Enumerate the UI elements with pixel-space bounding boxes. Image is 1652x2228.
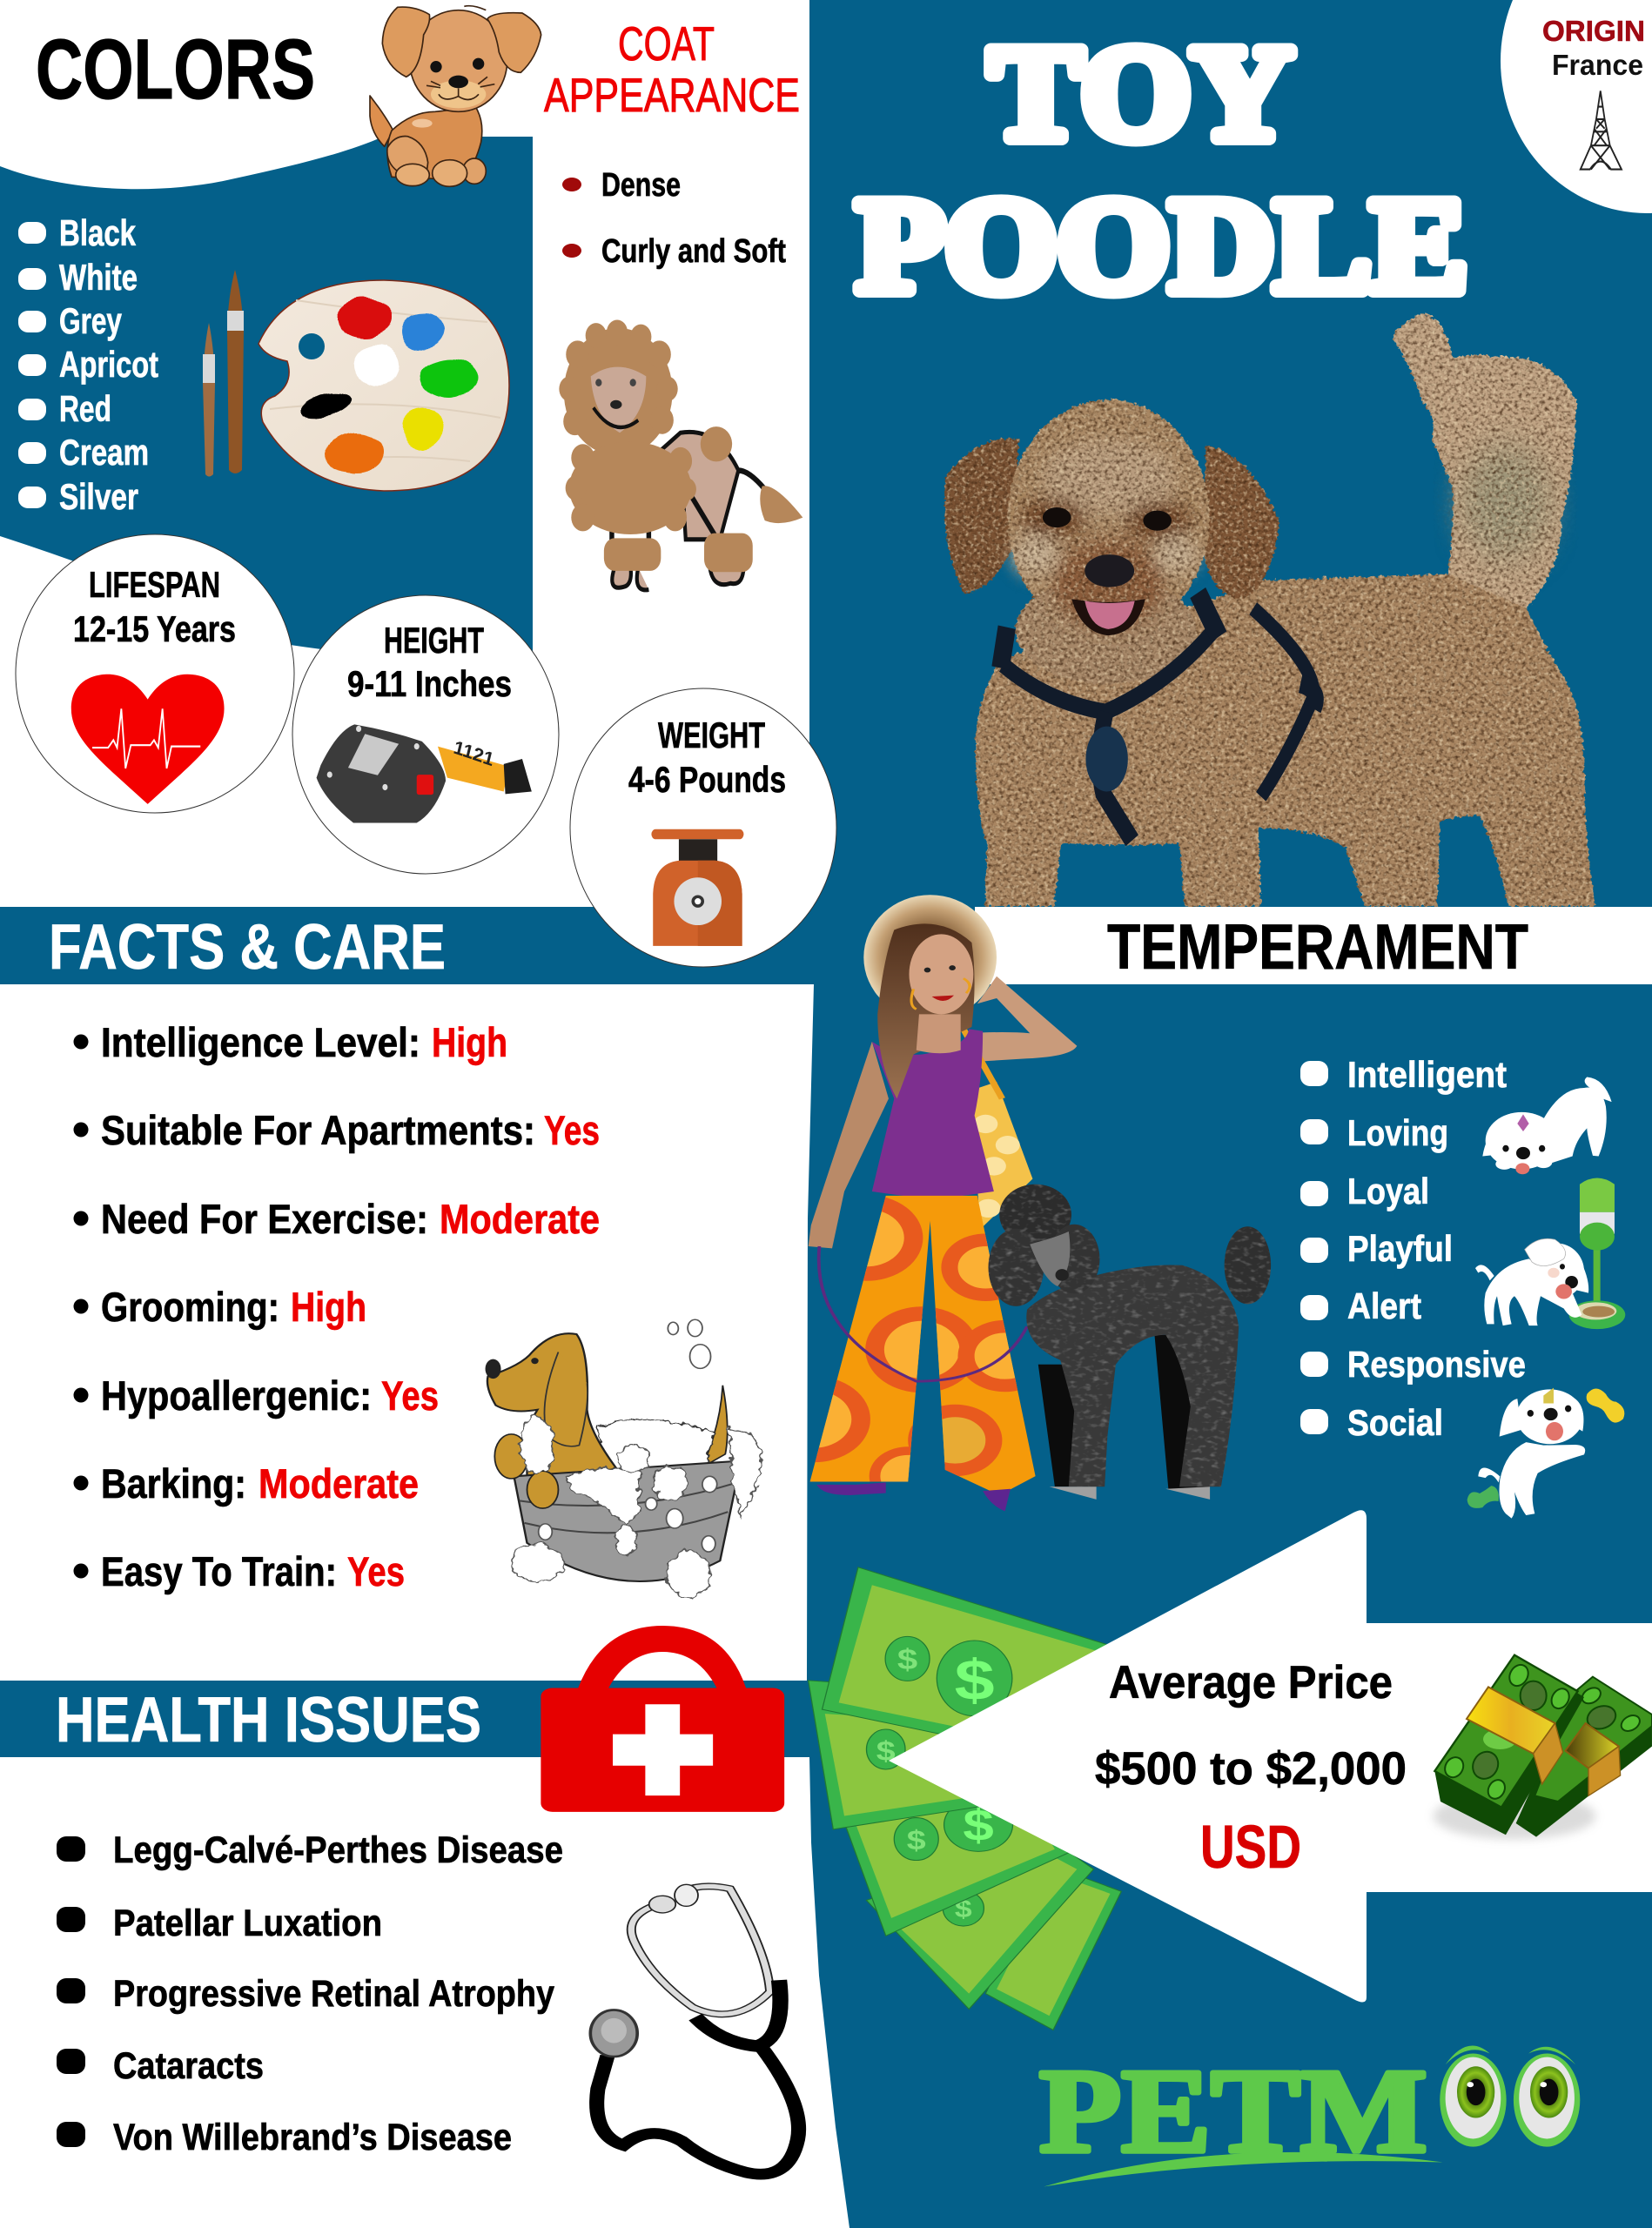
list: temperament: Loyal	[1347, 1171, 1429, 1211]
band: temperament: TEMPERAMENT	[1107, 912, 1528, 983]
list: facts and care: Suitable For Apartments:	[101, 1107, 535, 1153]
callout arrow: average price: USD	[1200, 1813, 1301, 1881]
icon: puppy	[370, 6, 541, 186]
list: temperament	[1300, 1054, 1526, 1443]
list: health issues: Progressive Retinal Atrophy	[113, 1973, 554, 2015]
icon: stethoscope	[590, 1884, 799, 2174]
list: health issues: Patellar Luxation	[113, 1903, 382, 1944]
title	[856, 18, 1467, 320]
list: health issues: Von Willebrand’s Disease	[113, 2117, 512, 2158]
list: colors: Black	[59, 212, 137, 253]
panel: top left white area	[0, 0, 809, 907]
illustration: fan of dollar bills: $	[955, 1895, 972, 1923]
illustration: dog in bath tub	[486, 1319, 762, 1597]
list: coat traits: Dense	[601, 167, 681, 204]
heading: coat appearance: COAT	[618, 17, 715, 70]
icon: eiffel tower	[1581, 91, 1622, 170]
list: colors: Red	[59, 388, 111, 429]
circle: height: 9-11 Inches	[347, 663, 512, 704]
list: health issues: Legg-Calvé-Perthes Disease	[113, 1829, 563, 1871]
list: health issues	[57, 1829, 563, 2158]
illustration: fan of dollar bills	[809, 1567, 1121, 2030]
icon: paint palette	[259, 280, 509, 491]
circle: height: HEIGHT	[384, 620, 484, 661]
illustration: fan of dollar bills: $	[955, 1648, 995, 1712]
illustration: fan of dollar bills: $	[876, 1735, 896, 1767]
list: temperament: Responsive	[1347, 1344, 1526, 1385]
list: temperament: Alert	[1347, 1285, 1421, 1326]
list: facts and care: Grooming:	[101, 1284, 279, 1330]
list: facts and care: High	[432, 1019, 507, 1065]
list: colors: Cream	[59, 432, 149, 473]
list: colors: Silver	[59, 476, 138, 517]
illustration: fan of dollar bills: $	[897, 1644, 917, 1676]
list: facts and care: High	[291, 1284, 366, 1330]
band: temperament	[975, 907, 1652, 984]
list: temperament: Loving	[1347, 1112, 1448, 1153]
list: facts and care: Yes	[544, 1107, 600, 1153]
list: colors: White	[59, 257, 138, 298]
circle: weight: 4-6 Pounds	[628, 759, 786, 800]
circle: origin: France	[1552, 49, 1643, 81]
callout arrow: average price	[889, 1510, 1652, 2003]
list: colors: Grey	[59, 300, 122, 341]
band: facts and care	[0, 908, 809, 984]
title: POODLE	[856, 171, 1467, 320]
circle: height	[292, 595, 559, 874]
list: colors: Apricot	[59, 344, 158, 385]
list: temperament: Playful	[1347, 1228, 1453, 1269]
callout arrow: average price: Average Price	[1109, 1657, 1393, 1708]
list: colors	[18, 212, 158, 517]
list: facts and care: Moderate	[259, 1460, 419, 1507]
icon: money stacks	[1434, 1655, 1652, 1839]
panel: lower left white area	[0, 984, 814, 1681]
list: temperament: Social	[1347, 1402, 1443, 1443]
panel: health white area	[0, 1757, 850, 2228]
list: facts and care: Yes	[381, 1372, 439, 1419]
list: facts and care: Need For Exercise:	[101, 1196, 428, 1242]
circle: origin: ORIGIN	[1542, 15, 1645, 47]
icon: first aid kit	[541, 1626, 784, 1812]
icon: paint brushes	[203, 270, 244, 477]
list: facts and care: Hypoallergenic:	[101, 1372, 372, 1419]
circle: weight	[570, 688, 836, 967]
heading: coat appearance	[544, 17, 800, 122]
heading: colors: COLORS	[36, 22, 315, 117]
icon: playing puppy	[1467, 1388, 1624, 1519]
circle: origin	[1501, 0, 1652, 213]
list: facts and care: Intelligence Level:	[101, 1019, 420, 1065]
illustration: cartoon poodle	[559, 320, 802, 590]
list: facts and care: Yes	[347, 1548, 405, 1594]
band: facts and care: FACTS & CARE	[49, 912, 446, 983]
title: TOY	[989, 18, 1293, 168]
circle: height: 1121	[452, 737, 496, 771]
band: health issues	[0, 1681, 809, 1757]
list: facts and care: Moderate	[440, 1196, 600, 1242]
list: coat traits	[562, 167, 786, 270]
icon: water bottle and bowl	[1475, 1178, 1625, 1329]
list: temperament: Intelligent	[1347, 1054, 1507, 1095]
illustration: white puppies	[1467, 1077, 1625, 1519]
list: facts and care	[73, 1019, 600, 1594]
circle: lifespan	[16, 534, 294, 813]
illustration: woman with black poodle	[767, 895, 1271, 1511]
circle: lifespan: LIFESPAN	[89, 564, 220, 605]
list: facts and care: Easy To Train:	[101, 1548, 337, 1594]
illustration: fan of dollar bills: $	[963, 1801, 994, 1850]
illustration: fan of dollar bills: $	[907, 1824, 926, 1856]
band: health issues: HEALTH ISSUES	[56, 1685, 481, 1755]
list: coat traits: Curly and Soft	[601, 233, 786, 270]
callout arrow: average price: $500 to $2,000	[1095, 1743, 1407, 1795]
icon: bowing puppy	[1482, 1077, 1612, 1174]
logo: petmoo: PETM	[1039, 2044, 1427, 2178]
list: health issues: Cataracts	[113, 2045, 264, 2087]
circle: lifespan: 12-15 Years	[73, 608, 236, 649]
heading: coat appearance: APPEARANCE	[544, 68, 800, 122]
circle: weight: WEIGHT	[658, 715, 765, 755]
panel: colors blue wave	[0, 137, 533, 661]
photo illustration: toy poodle dog	[944, 313, 1595, 906]
list: facts and care: Barking:	[101, 1460, 246, 1507]
